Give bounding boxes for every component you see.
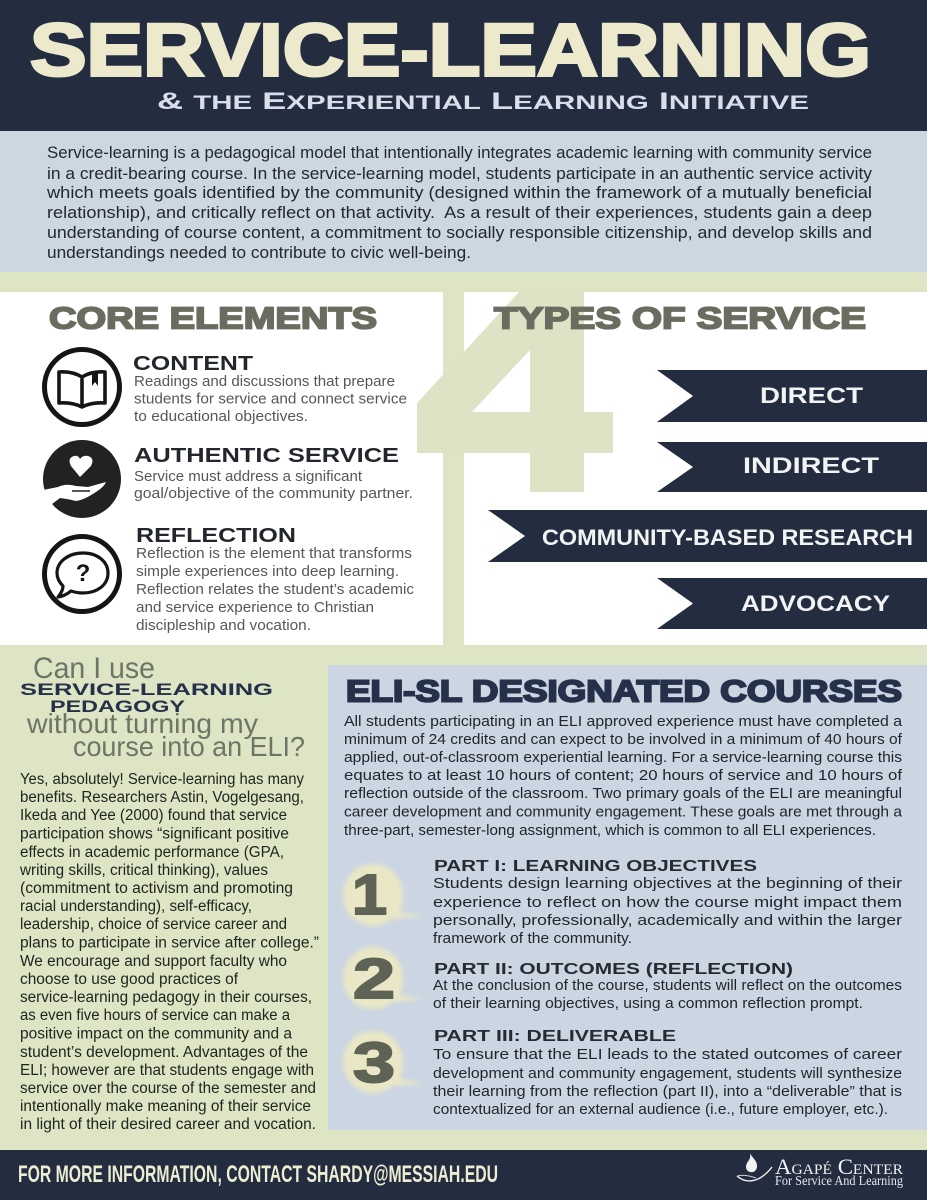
part II	[433, 961, 902, 1012]
overview text: minimum of 24 credits and can expect to be involved in a minimum of 40 hours of	[344, 731, 903, 748]
element: content: to educational objectives.	[134, 408, 308, 425]
element: content: Readings and discussions that prepare	[134, 373, 395, 390]
contact line: FOR MORE INFORMATION, CONTACT SHARDY@MESSIAH.EDU	[18, 1161, 498, 1188]
question heading: without turning my	[26, 708, 258, 739]
part I: PART I: LEARNING OBJECTIVES	[434, 858, 757, 875]
icon: open book	[44, 350, 120, 424]
overview text: reflection outside of the classroom. Two primary goals of the ELI are meaningful	[344, 785, 902, 802]
answer text: as even five hours of service can make a	[20, 1007, 290, 1024]
number badge 3: 3	[353, 1031, 395, 1095]
answer text: plans to participate in service after college.”	[20, 934, 319, 952]
logo wordmark: Agapé Center	[775, 1154, 903, 1179]
answer text: intentionally make meaning of their service	[20, 1098, 311, 1115]
element: content: CONTENT	[133, 353, 253, 375]
icon: Agapé Center flame logo	[737, 1153, 772, 1181]
panel: introduction: understandings needed to contribute to civic well-being.	[47, 243, 471, 262]
overview text: All students participating in an ELI approved experience must have completed a	[344, 713, 903, 730]
header banner	[0, 0, 927, 131]
footer bar	[0, 1150, 927, 1200]
number badge 3	[343, 1031, 423, 1095]
answer text: effects in academic performance (GPA,	[20, 844, 284, 861]
number badge 2	[343, 947, 423, 1011]
part III	[433, 1028, 902, 1118]
answer text: Ikeda and Yee (2000) found that service	[20, 807, 287, 824]
logo wordmark: For Service And Learning	[775, 1174, 903, 1189]
subtitle: & THE E XPERIENTIAL L EARNING I NITIATIVE	[157, 88, 809, 115]
panel: introduction: Service-learning is a pedagogical model that intentionally integrates academic learning with community service	[47, 143, 872, 162]
large numeral 4	[417, 292, 613, 492]
answer text: in light of their desired career and vocation.	[20, 1116, 316, 1133]
ribbon: community-based research	[488, 510, 927, 562]
logo wordmark	[775, 1154, 903, 1189]
answer text: (commitment to activism and promoting	[20, 880, 293, 897]
element: reflection: and service experience to Christian	[136, 599, 374, 616]
element: reflection: REFLECTION	[136, 525, 296, 547]
answer text: positive impact on the community and a	[20, 1026, 292, 1042]
question heading	[20, 652, 305, 762]
panel: introduction: which meets goals identified by the community (designed within the framework of a mutually beneficial	[46, 183, 872, 202]
panel: introduction: in a credit-bearing course. In the service-learning model, students participate in an authentic service activity	[47, 164, 873, 183]
element: authentic service	[134, 445, 413, 502]
number badge 1: 1	[352, 863, 387, 927]
part III: their learning from the reflection (part II), into a “deliverable” that is	[433, 1083, 902, 1100]
answer text: service over the course of the semester and	[20, 1080, 316, 1097]
element: reflection: Reflection is the element that transforms	[136, 545, 412, 562]
question heading: SERVICE-LEARNING	[20, 680, 273, 699]
element: reflection	[136, 525, 414, 634]
part III: To ensure that the ELI leads to the stated outcomes of career	[433, 1046, 902, 1063]
title: SERVICE-LEARNING	[30, 8, 871, 92]
answer text: racial understanding), self-efficacy,	[20, 898, 252, 915]
answer text: participation shows “significant positive	[20, 826, 289, 842]
ribbon: advocacy	[657, 578, 927, 629]
ribbon: direct: DIRECT	[760, 383, 863, 408]
answer text: writing skills, critical thinking), values	[19, 862, 268, 879]
element: authentic service: AUTHENTIC SERVICE	[134, 445, 399, 467]
ribbon: indirect	[657, 442, 927, 492]
answer text: We encourage and support faculty who	[20, 953, 287, 970]
part II: of their learning objectives, using a common reflection prompt.	[433, 995, 863, 1012]
icon: heart in hand	[35, 440, 121, 518]
ribbon: advocacy: ADVOCACY	[741, 591, 890, 616]
heading: ELI-SL designated courses: ELI-SL DESIGNATED COURSES	[346, 674, 902, 708]
question heading: course into an ELI?	[73, 731, 305, 762]
question heading: Can I use	[33, 652, 155, 685]
panel: introduction: understanding of course content, a commitment to socially responsible citizenship, and develop skills and	[47, 223, 872, 242]
part III: development and community engagement, students will synthesize	[433, 1065, 902, 1082]
element: content	[133, 353, 407, 425]
panel: ELI-SL designated courses	[328, 665, 927, 1130]
number badge 2: 2	[353, 947, 395, 1011]
answer text: service-learning pedagogy in their courses,	[20, 989, 312, 1006]
panel: types of service	[488, 300, 927, 629]
answer text: ELI; however are that students engage with	[20, 1062, 314, 1079]
answer text	[19, 771, 319, 1133]
panel: introduction: relationship), and critically reflect on that activity. As a result of their experiences, students gain a deep	[47, 203, 872, 222]
overview text	[344, 713, 903, 839]
element: reflection: discipleship and vocation.	[136, 617, 311, 634]
part I: Students design learning objectives at the beginning of their	[433, 875, 902, 892]
panel: core elements	[35, 300, 414, 634]
panel: can I use service-learning pedagogy	[19, 652, 319, 1133]
answer text: benefits. Researchers Astin, Vogelgesang,	[20, 789, 304, 806]
overview text: applied, out-of-classroom experiential learning. For a service-learning course this	[344, 749, 902, 766]
ribbon: community-based research: COMMUNITY-BASED RESEARCH	[542, 525, 913, 550]
heading: core elements: CORE ELEMENTS	[49, 300, 377, 336]
question heading: PEDAGOGY	[50, 697, 186, 716]
answer text: choose to use good practices of	[20, 971, 239, 988]
panel: core elements background	[0, 292, 443, 645]
ribbon: indirect: INDIRECT	[743, 453, 879, 478]
overview text: three-part, semester-long assignment, which is common to all ELI experiences.	[344, 822, 876, 839]
part III: PART III: DELIVERABLE	[434, 1028, 676, 1045]
part II: PART II: OUTCOMES (REFLECTION)	[434, 961, 793, 978]
icon: question speech bubble: ?	[76, 560, 90, 587]
element: content: students for service and connect service	[134, 390, 407, 408]
ribbon: direct	[657, 370, 927, 422]
part I	[433, 858, 902, 947]
overview text: equates to at least 10 hours of content; 20 hours of service and 10 hours of	[344, 767, 903, 784]
part I: framework of the community.	[433, 930, 632, 947]
answer text: leadership, choice of service career and	[20, 916, 287, 933]
icon: question speech bubble	[44, 536, 120, 612]
part I: personally, professionally, academically and within the larger	[433, 912, 902, 929]
heading: types of service: TYPES OF SERVICE	[494, 300, 866, 336]
answer text: Yes, absolutely! Service-learning has many	[20, 771, 304, 788]
overview text: career development and community engagement. These goals are met through a	[344, 804, 903, 820]
element: authentic service: goal/objective of the community partner.	[134, 485, 413, 502]
number badge 1	[343, 863, 423, 927]
element: authentic service: Service must address a significant	[134, 468, 363, 485]
part I: experience to reflect on how the course might impact them	[433, 894, 902, 911]
element: reflection: simple experiences into deep learning.	[136, 563, 399, 580]
element: reflection: Reflection relates the student’s academic	[136, 581, 414, 598]
answer text: student’s development. Advantages of the	[20, 1044, 308, 1061]
part II: At the conclusion of the course, students will reflect on the outcomes	[433, 977, 902, 994]
panel: introduction	[0, 131, 927, 272]
panel: types of service background	[464, 292, 927, 645]
part III: contextualized for an external audience (i.e., future employer, etc.).	[433, 1101, 888, 1118]
